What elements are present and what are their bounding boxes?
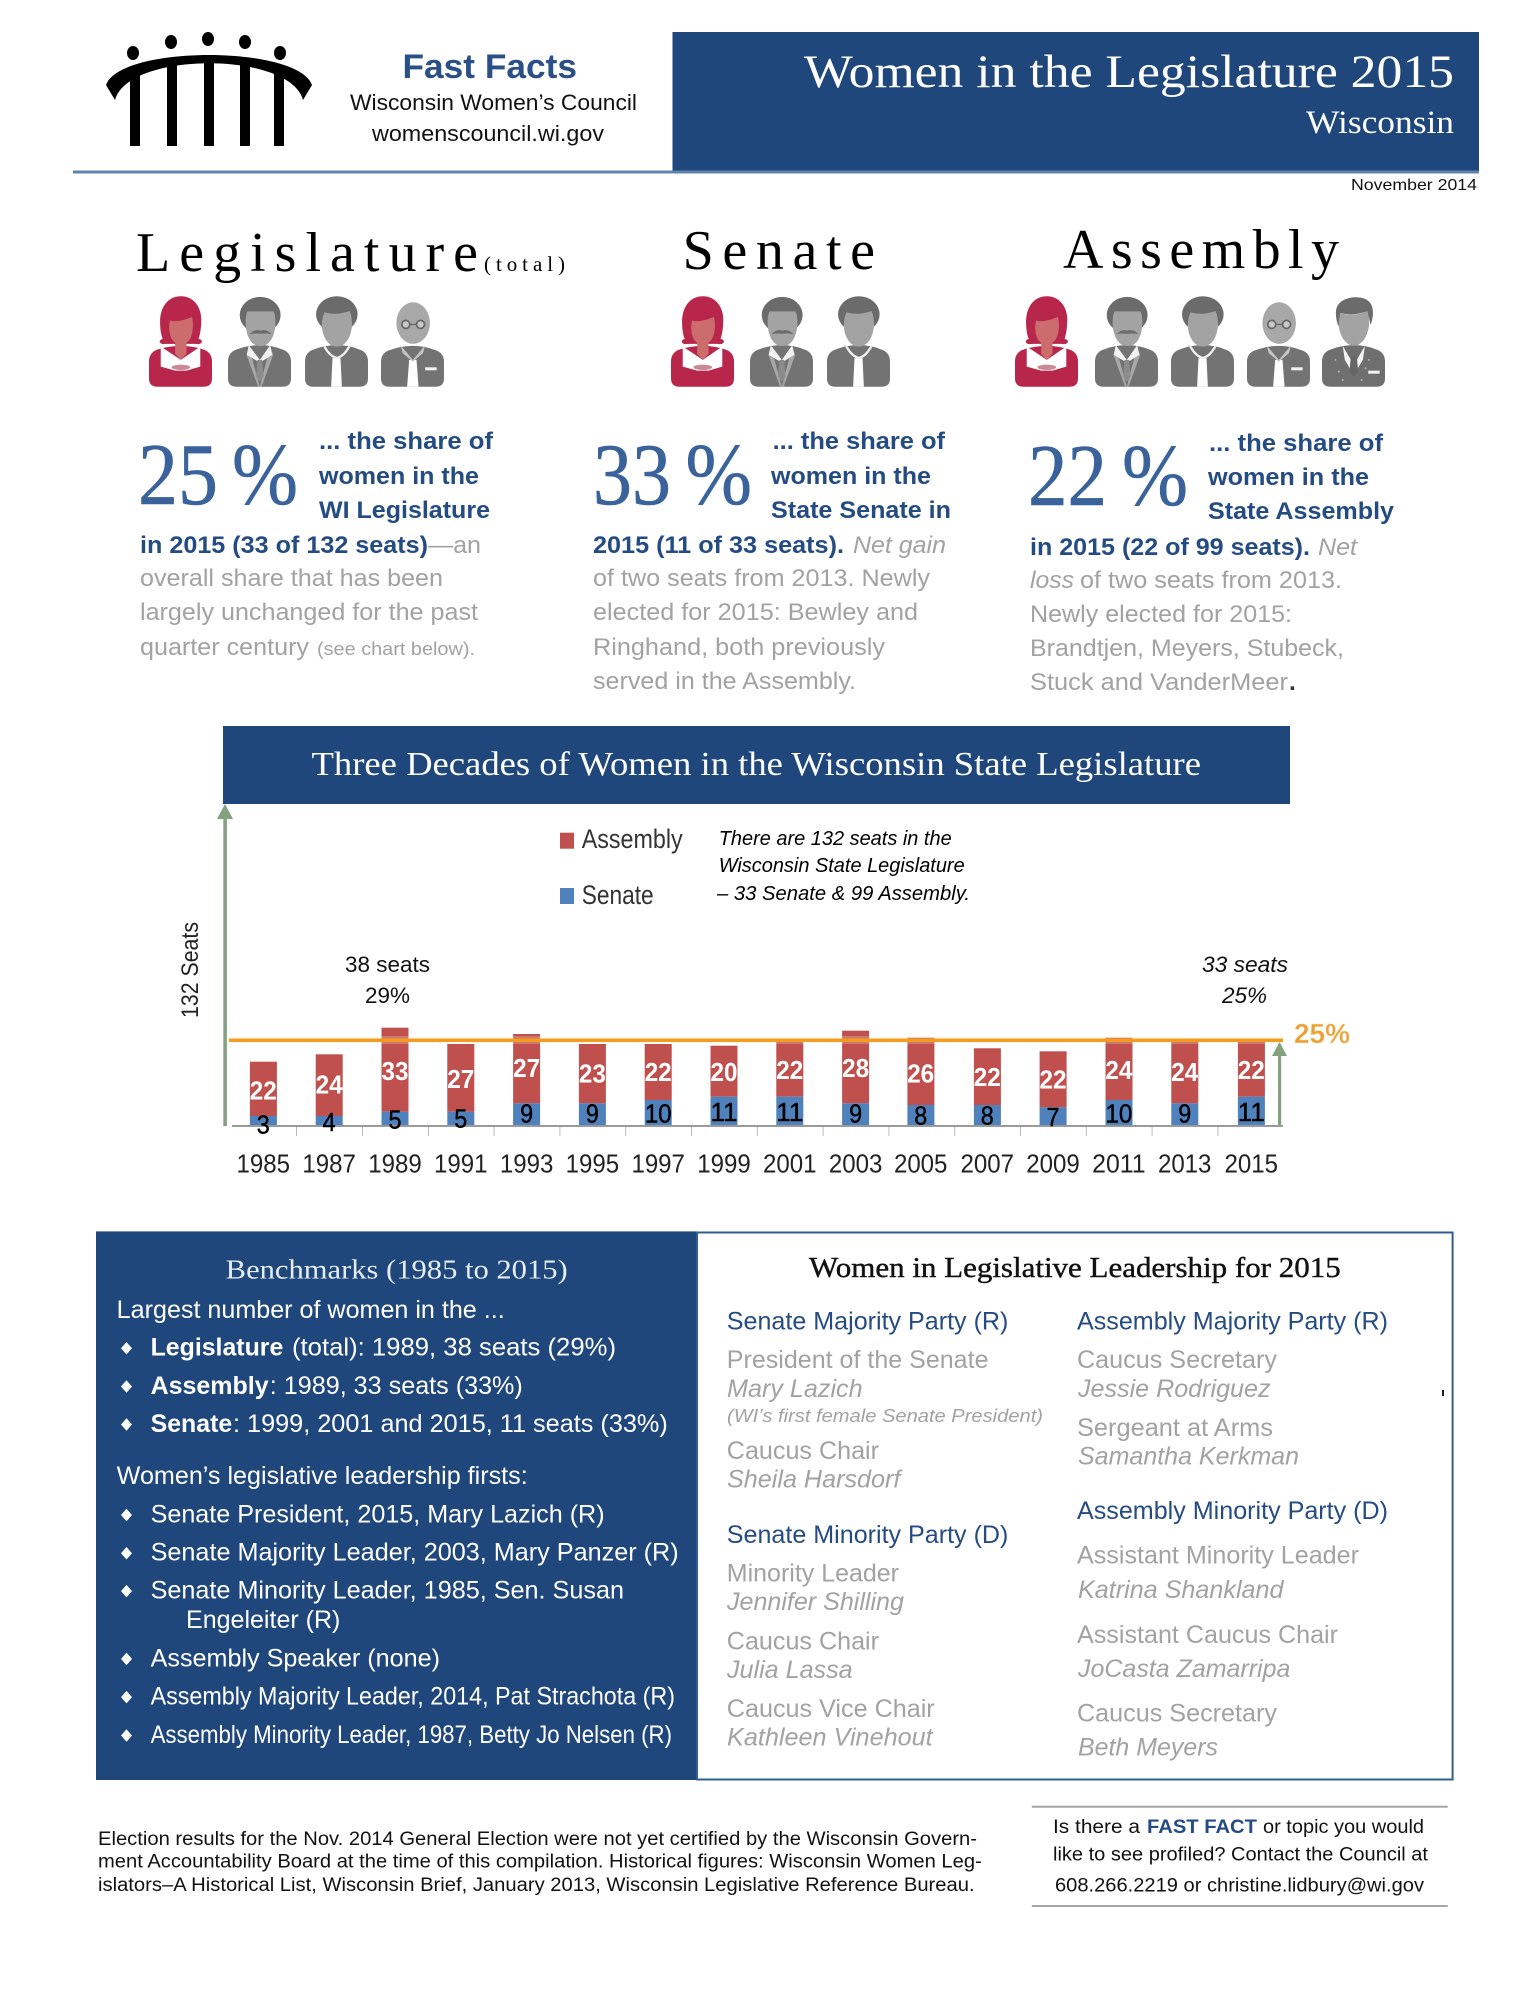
x axis year labels xyxy=(237,1149,1278,1179)
assembly seat values xyxy=(250,1053,1265,1106)
panel: senate xyxy=(593,220,951,695)
text block: assembly description: Stuck and VanderMeer xyxy=(1030,669,1288,696)
list: largest number of women xyxy=(117,1296,668,1438)
heading: Legislature: (total) xyxy=(484,252,565,276)
list: leadership firsts: Engeleiter (R) xyxy=(186,1606,340,1634)
assembly minority column: Katrina Shankland xyxy=(1078,1576,1285,1604)
title banner xyxy=(672,32,1479,171)
assembly seat values: 22 xyxy=(776,1055,803,1085)
list: largest number of women: Legislature xyxy=(151,1334,283,1362)
x axis year labels: 2013 xyxy=(1158,1149,1211,1179)
text block: senate description: served in the Assembly. xyxy=(593,668,856,695)
organisation name block: Fast Facts xyxy=(402,48,577,86)
text block: legislature description: ... the share of xyxy=(319,428,494,455)
assembly seat values: 24 xyxy=(316,1070,343,1100)
logo: Wisconsin Women's Council arch xyxy=(106,32,312,146)
list: largest number of women: Assembly xyxy=(151,1372,269,1400)
text block: assembly description: Brandtjen, Meyers, Stubeck, xyxy=(1030,635,1344,662)
organisation name block: womenscouncil.wi.gov xyxy=(371,121,604,146)
assembly majority column: Samantha Kerkman xyxy=(1078,1443,1299,1471)
senate seat values: 9 xyxy=(586,1098,599,1128)
footnote: sources: ment Accountability Board at the time of this compilation. Historical figures: Wisconsin Women Leg- xyxy=(98,1852,982,1873)
list: leadership firsts: Assembly Speaker (none) xyxy=(151,1644,440,1672)
senate seat values: 8 xyxy=(981,1100,994,1130)
header band xyxy=(73,32,1479,194)
note on total seats: There are 132 seats in the xyxy=(719,828,952,850)
list: largest number of women: : 1989, 33 seats (33%) xyxy=(270,1372,523,1400)
statistic: 22 percent xyxy=(1028,428,1188,525)
assembly seat values: 27 xyxy=(447,1064,474,1094)
text block: senate description: women in the xyxy=(770,463,931,490)
note on total seats: Wisconsin State Legislature xyxy=(719,855,965,877)
panel: legislative leadership xyxy=(697,1232,1453,1780)
reference line: 25 percent xyxy=(229,1018,1350,1049)
text block: assembly description: in 2015 (22 of 99 seats). xyxy=(1030,534,1310,561)
text block: assembly description: women in the xyxy=(1207,464,1369,491)
list: largest number of women: : 1999, 2001 and 2015, 11 seats (33%) xyxy=(233,1410,668,1438)
note on total seats xyxy=(716,828,970,905)
x axis year labels: 2005 xyxy=(894,1149,947,1179)
senate minority column: Caucus Chair xyxy=(727,1627,879,1655)
senate seat values: 4 xyxy=(323,1107,336,1137)
statistic: 25 percent xyxy=(138,427,298,524)
text block: assembly description: of two seats from 2013. xyxy=(1080,567,1342,594)
senate seat values: 11 xyxy=(710,1097,738,1127)
y axis label: 132 Seats xyxy=(177,922,204,1018)
list: largest number of women: (total): 1989, 38 seats (29%) xyxy=(292,1334,616,1362)
senate seat values: 9 xyxy=(1178,1098,1191,1128)
callout: 2015 xyxy=(1202,952,1288,1008)
organisation name block: Wisconsin Women’s Council xyxy=(350,90,637,115)
assembly seat values: 28 xyxy=(842,1053,869,1083)
senate minority column: Caucus Vice Chair xyxy=(727,1695,935,1723)
legend: Senate xyxy=(582,880,654,910)
text block: legislature description: quarter century xyxy=(140,634,310,661)
assembly seat values: 27 xyxy=(513,1053,540,1083)
text block: assembly description xyxy=(1030,430,1394,696)
text block: assembly description: . xyxy=(1289,669,1296,696)
assembly minority column: JoCasta Zamarripa xyxy=(1077,1655,1290,1683)
list: leadership firsts xyxy=(117,1462,679,1749)
title banner: Women in the Legislature 2015 xyxy=(804,46,1454,98)
callout: contact the council: Is there a xyxy=(1053,1817,1140,1838)
x axis year labels: 2003 xyxy=(829,1149,882,1179)
chart title banner xyxy=(223,726,1290,804)
senate minority column xyxy=(726,1521,1008,1752)
senate majority column: Mary Lazich xyxy=(727,1375,863,1403)
senate minority column: Jennifer Shilling xyxy=(726,1588,904,1616)
statistic: 25 percent: % xyxy=(232,427,298,524)
callout: contact the council: FAST FACT xyxy=(1147,1817,1257,1838)
senate majority column: President of the Senate xyxy=(727,1346,988,1374)
assembly minority column: Beth Meyers xyxy=(1078,1733,1218,1761)
callout: 1989 peak: 38 seats xyxy=(345,952,430,977)
senate seat values: 5 xyxy=(388,1104,402,1134)
senate minority column: Minority Leader xyxy=(727,1559,899,1587)
assembly majority column: Jessie Rodriguez xyxy=(1077,1375,1271,1403)
assembly seat values: 24 xyxy=(1171,1057,1199,1087)
x axis year labels: 1993 xyxy=(500,1149,553,1179)
assembly seat values: 33 xyxy=(382,1056,408,1086)
assembly minority column: Assembly Minority Party (D) xyxy=(1077,1497,1388,1525)
date: November 2014 xyxy=(1351,177,1477,194)
statistic: 25 percent: 25 xyxy=(138,427,218,524)
panel: benchmarks xyxy=(96,1231,697,1780)
statistic: 33 percent: % xyxy=(686,427,752,524)
statistic: 22 percent: 22 xyxy=(1028,428,1107,525)
heading: Legislature: Legislature xyxy=(136,222,478,284)
senate seat values: 8 xyxy=(914,1100,927,1130)
senate majority column: Caucus Chair xyxy=(727,1437,879,1465)
text block: legislature description: WI Legislature xyxy=(319,497,490,524)
text block: legislature description: in 2015 (33 of 132 seats) xyxy=(140,532,428,559)
text block: senate description: ... the share of xyxy=(773,428,946,455)
senate seat values: 11 xyxy=(1238,1097,1265,1127)
assembly majority column: Assembly Majority Party (R) xyxy=(1077,1308,1388,1336)
footnote: sources xyxy=(98,1829,982,1896)
legend xyxy=(560,824,683,910)
icons: one woman in five representatives xyxy=(1015,296,1385,387)
callout: contact the council: 608.266.2219 or christine.lidbury@wi.gov xyxy=(1055,1876,1425,1897)
list: leadership firsts: Women’s legislative leadership firsts: xyxy=(117,1462,528,1490)
assembly majority column: Caucus Secretary xyxy=(1077,1346,1277,1374)
panel: bar chart section xyxy=(177,726,1350,1179)
reference line: 25 percent: 25% xyxy=(1294,1018,1350,1049)
panel: legislature total xyxy=(136,222,565,661)
heading: Assembly: Assembly xyxy=(1063,219,1339,281)
x axis year labels: 2011 xyxy=(1092,1149,1146,1179)
text block: senate description: State Senate in xyxy=(771,497,951,524)
x axis year labels: 1989 xyxy=(368,1149,422,1179)
senate majority column: Senate Majority Party (R) xyxy=(727,1308,1008,1336)
text block: senate description: of two seats from 2013. Newly xyxy=(593,565,931,592)
text block: assembly description: Net xyxy=(1318,534,1358,561)
assembly seat values: 20 xyxy=(710,1057,738,1087)
senate seat values: 5 xyxy=(454,1104,467,1134)
list: leadership firsts: Senate Minority Leader, 1985, Sen. Susan xyxy=(151,1577,624,1605)
text block: senate description: 2015 (11 of 33 seats). xyxy=(593,532,844,559)
y axis arrow xyxy=(217,804,233,1126)
assembly seat values: 22 xyxy=(250,1076,277,1106)
list: leadership firsts: Assembly Majority Leader, 2014, Pat Strachota (R) xyxy=(151,1683,675,1711)
statistic: 22 percent: % xyxy=(1122,428,1188,525)
text block: legislature description: —an xyxy=(428,532,481,559)
assembly seat values: 24 xyxy=(1105,1055,1133,1085)
senate minority column: Kathleen Vinehout xyxy=(727,1724,934,1752)
senate seat values: 9 xyxy=(849,1098,862,1128)
note on total seats: – 33 Senate & 99 Assembly. xyxy=(716,883,970,905)
callout: 2015: 25% xyxy=(1221,983,1267,1008)
text block: legislature description xyxy=(140,428,494,661)
text block: assembly description: ... the share of xyxy=(1209,430,1384,457)
chart title banner: Three Decades of Women in the Wisconsin State Legislature xyxy=(312,746,1201,783)
callout: contact the council: or topic you would xyxy=(1263,1817,1424,1838)
assembly majority column: Sergeant at Arms xyxy=(1077,1414,1273,1442)
benchmarks heading: Benchmarks (1985 to 2015) xyxy=(226,1255,568,1285)
assembly seat values: 22 xyxy=(974,1062,1001,1092)
senate seat values: 11 xyxy=(776,1097,803,1127)
icons: one woman in three senators xyxy=(671,296,890,387)
text block: senate description xyxy=(593,428,951,695)
assembly seat values: 22 xyxy=(1238,1055,1265,1085)
senate minority column: Senate Minority Party (D) xyxy=(727,1521,1008,1549)
senate seat values: 7 xyxy=(1046,1102,1060,1132)
senate majority column: Sheila Harsdorf xyxy=(727,1466,903,1494)
assembly minority column: Caucus Secretary xyxy=(1077,1699,1277,1727)
senate majority column xyxy=(727,1308,1043,1494)
assembly seat values: 26 xyxy=(907,1058,934,1088)
list: leadership firsts: Senate President, 2015, Mary Lazich (R) xyxy=(151,1500,605,1528)
statistic: 33 percent: 33 xyxy=(593,427,671,524)
callout: 1989 peak: 29% xyxy=(365,983,410,1008)
assembly minority column: Assistant Minority Leader xyxy=(1077,1542,1359,1570)
x axis year labels: 2015 xyxy=(1225,1149,1278,1179)
callout: 2015: 33 seats xyxy=(1202,952,1288,977)
x axis year labels: 1997 xyxy=(631,1149,685,1179)
text block: senate description: Ringhand, both previously xyxy=(593,634,886,661)
list: largest number of women: Senate xyxy=(151,1410,232,1438)
x axis year labels: 1985 xyxy=(237,1149,290,1179)
panel: assembly xyxy=(1015,219,1394,696)
assembly seat values: 23 xyxy=(579,1058,606,1088)
text block: legislature description: (see chart below). xyxy=(317,638,475,659)
legend: Assembly xyxy=(582,824,683,854)
senate seat values xyxy=(257,1097,1265,1140)
text block: senate description: elected for 2015: Bewley and xyxy=(593,599,918,626)
list: largest number of women: Largest number of women in the ... xyxy=(117,1296,505,1324)
x axis year labels: 1995 xyxy=(566,1149,619,1179)
right arrow to 25 percent xyxy=(1272,1042,1287,1126)
list: leadership firsts: Assembly Minority Leader, 1987, Betty Jo Nelsen (R) xyxy=(151,1721,672,1749)
x axis year labels: 1991 xyxy=(434,1149,488,1179)
callout: 1989 peak xyxy=(345,952,430,1008)
senate seat values: 10 xyxy=(1105,1098,1132,1128)
senate seat values: 10 xyxy=(645,1098,672,1128)
x axis year labels: 2007 xyxy=(961,1149,1014,1179)
header rule xyxy=(73,170,1479,174)
footnote: sources: Election results for the Nov. 2014 General Election were not yet certified by the Wisconsin Govern- xyxy=(98,1829,977,1850)
assembly minority column xyxy=(1077,1497,1388,1761)
callout: contact the council: like to see profiled? Contact the Council at xyxy=(1053,1845,1429,1866)
text block: assembly description: loss xyxy=(1030,567,1074,594)
footnote: sources: islators–A Historical List, Wisconsin Brief, January 2013, Wisconsin Legislative Reference Bureau. xyxy=(98,1875,975,1896)
title banner: Wisconsin xyxy=(1306,105,1454,141)
text block: assembly description: Newly elected for 2015: xyxy=(1030,601,1292,628)
assembly majority column xyxy=(1077,1308,1388,1471)
bar chart: stacked seats xyxy=(232,1028,1283,1140)
senate seat values: 3 xyxy=(257,1110,270,1140)
heading: Senate: Senate xyxy=(683,220,875,282)
assembly seat values: 22 xyxy=(645,1057,672,1087)
text block: assembly description: State Assembly xyxy=(1208,498,1394,525)
organisation name block xyxy=(350,48,637,146)
senate majority column: (WI’s first female Senate President) xyxy=(727,1405,1043,1426)
senate minority column: Julia Lassa xyxy=(726,1656,853,1684)
assembly minority column: Assistant Caucus Chair xyxy=(1077,1621,1338,1649)
list: leadership firsts: Senate Majority Leader, 2003, Mary Panzer (R) xyxy=(151,1539,679,1567)
senate seat values: 9 xyxy=(520,1098,533,1128)
statistic: 33 percent xyxy=(593,427,752,524)
x axis year labels: 2009 xyxy=(1026,1149,1080,1179)
x axis year labels: 1999 xyxy=(697,1149,751,1179)
text block: senate description: Net gain xyxy=(853,532,946,559)
text block: legislature description: women in the xyxy=(318,463,479,490)
icons: one woman in four legislators xyxy=(149,296,444,387)
leadership heading: Women in Legislative Leadership for 2015 xyxy=(809,1253,1341,1284)
text block: legislature description: largely unchanged for the past xyxy=(140,599,478,626)
callout: contact the council xyxy=(1032,1806,1448,1907)
x axis year labels: 2001 xyxy=(763,1149,817,1179)
x axis year labels: 1987 xyxy=(302,1149,356,1179)
text block: legislature description: overall share that has been xyxy=(140,565,443,592)
assembly seat values: 22 xyxy=(1040,1064,1066,1094)
